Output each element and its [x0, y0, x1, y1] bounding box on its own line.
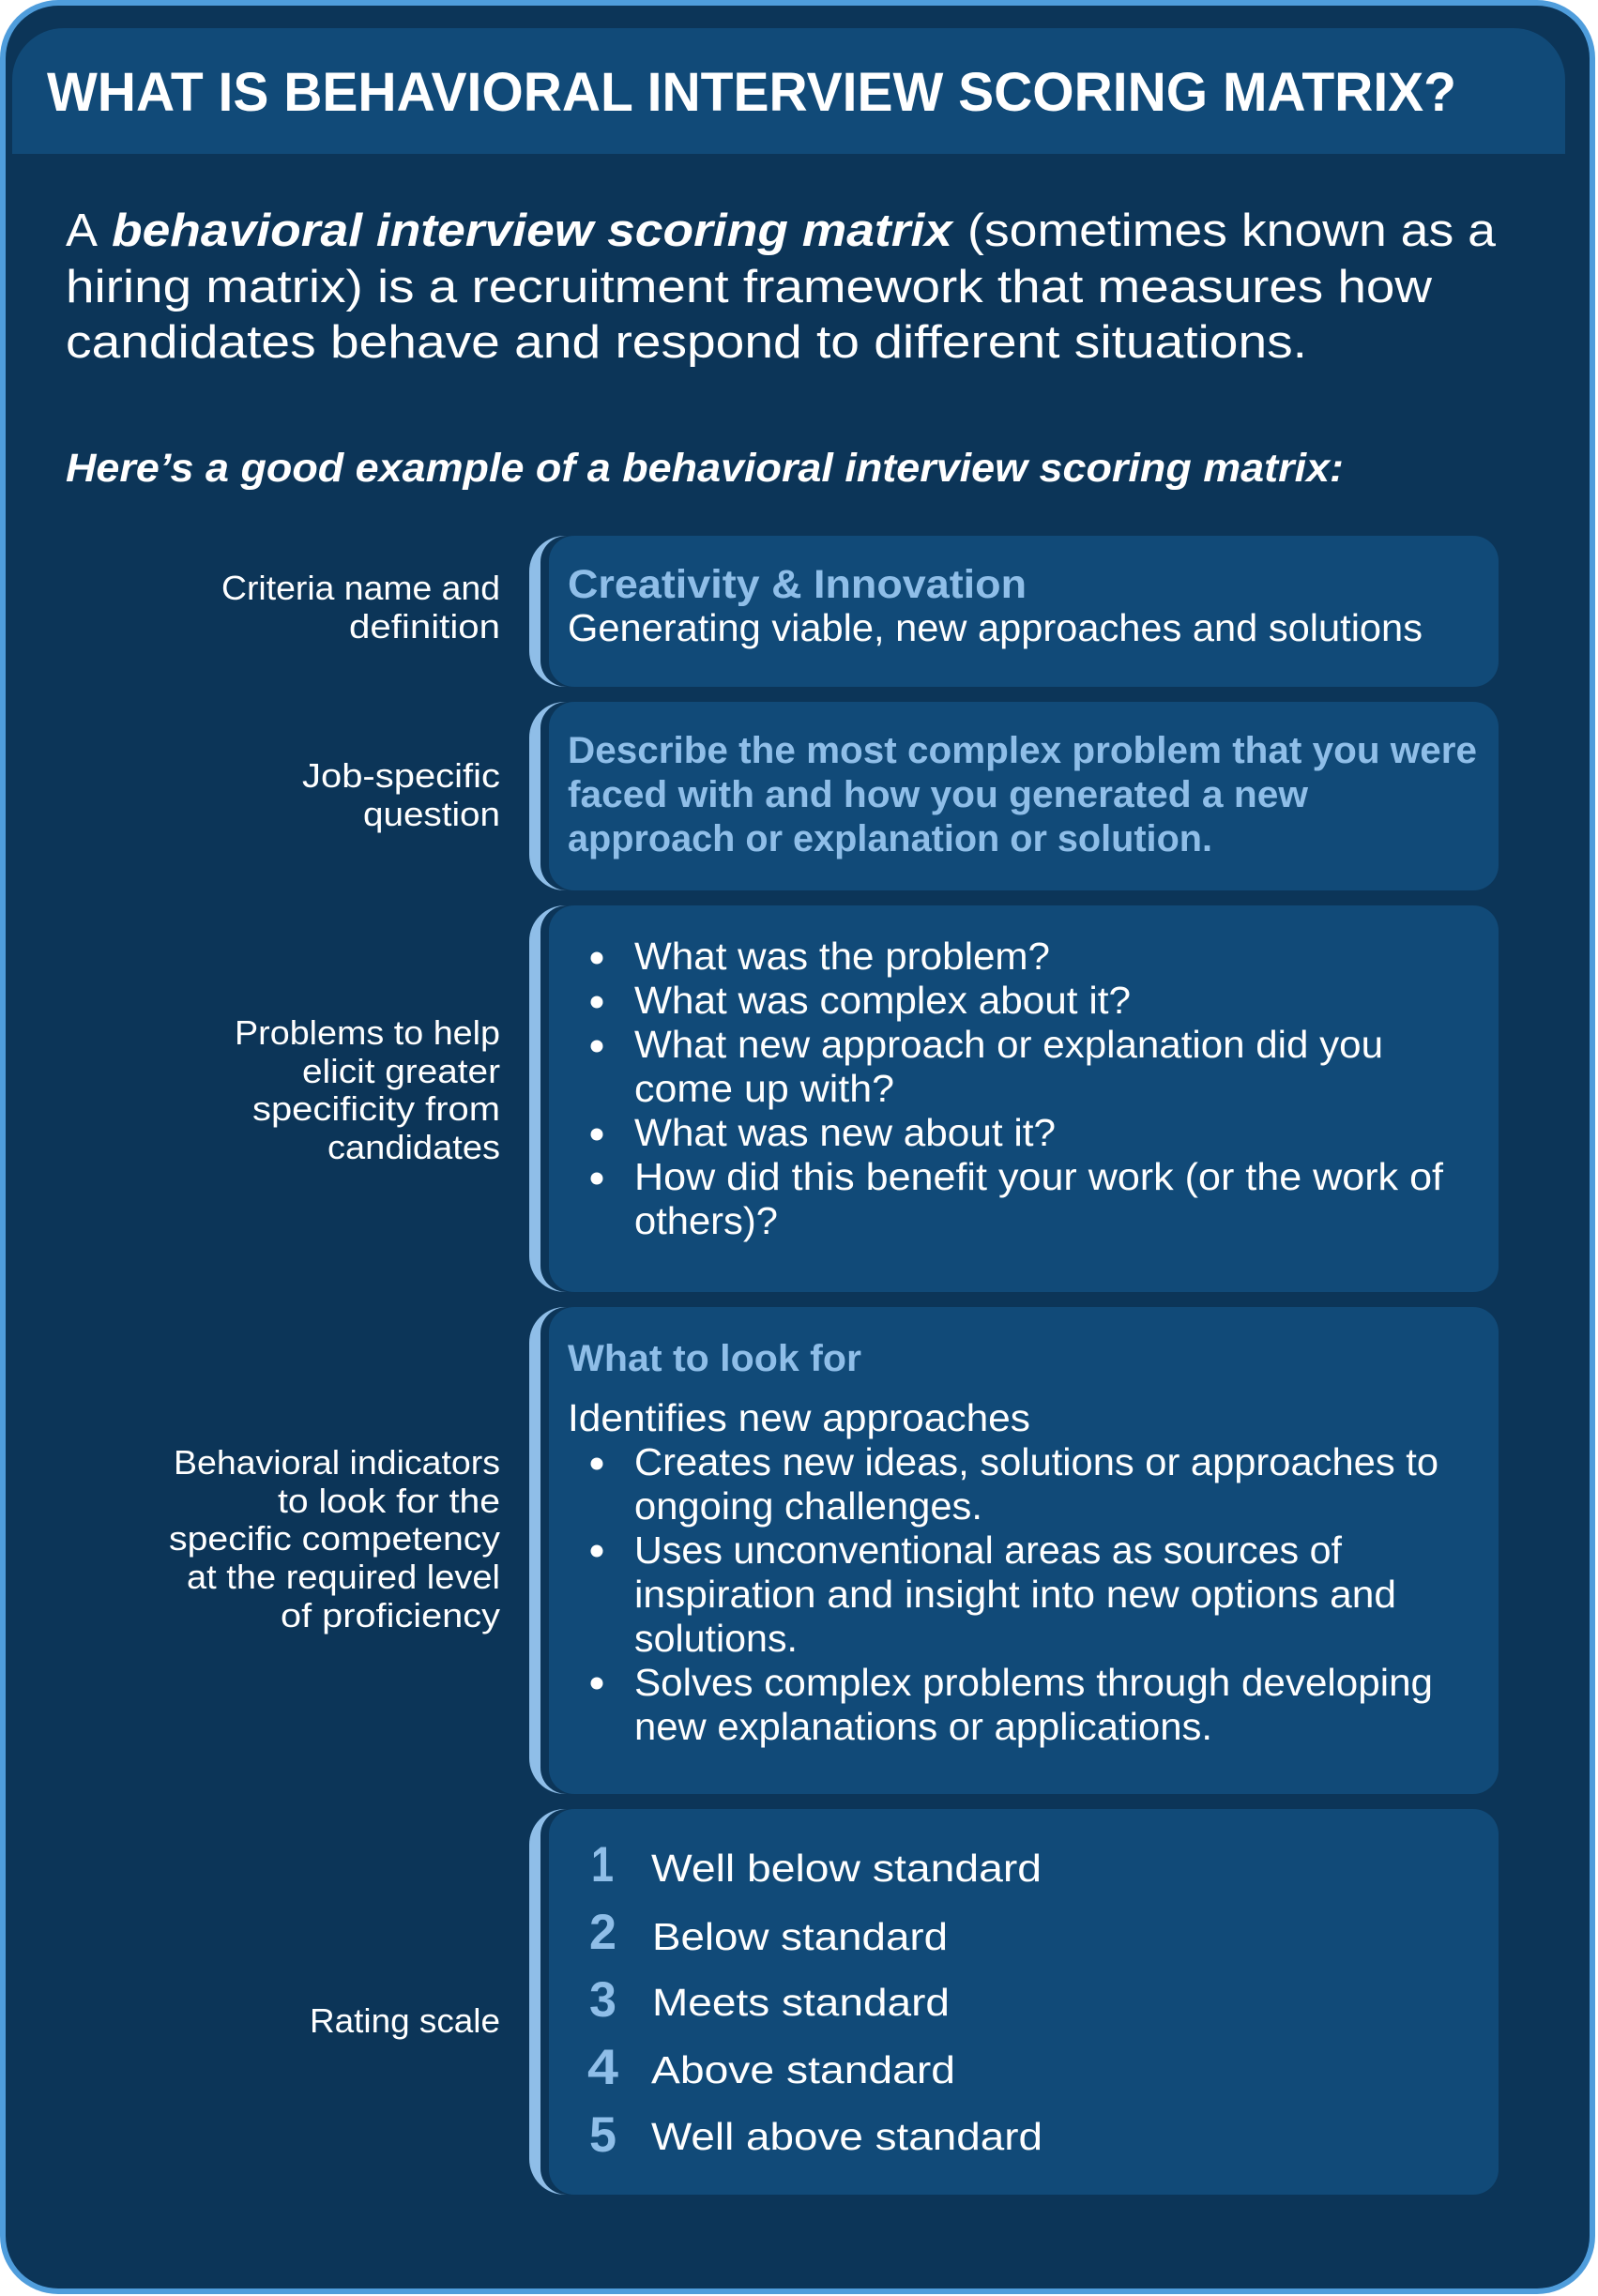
- bullet list: others)?: [634, 1199, 778, 1242]
- rating 1: 1: [591, 1837, 614, 1893]
- label: behavioral indicators: at the required level: [187, 1558, 500, 1596]
- title banner: WHAT IS BEHAVIORAL INTERVIEW SCORING MATRIX?: [47, 62, 1456, 123]
- panel: criteria: [529, 536, 1499, 687]
- indicator list: Creates new ideas, solutions or approaches to: [634, 1440, 1438, 1483]
- label: criteria name and definition: definition: [349, 607, 500, 646]
- panel heading: What to look for: [568, 1338, 861, 1379]
- label: job-specific question: [302, 756, 500, 833]
- label: behavioral indicators: Behavioral indicators: [174, 1443, 500, 1482]
- rating 4: [587, 2040, 955, 2095]
- rating 5: 5: [589, 2107, 616, 2163]
- label: probes: candidates: [327, 1128, 500, 1166]
- rating 2: 2: [589, 1905, 616, 1960]
- intro paragraph: candidates behave and respond to different situations.: [66, 317, 1307, 368]
- rating 3: 3: [589, 1972, 616, 2028]
- criteria definition: Generating viable, new approaches and solutions: [568, 606, 1423, 649]
- panel: job-specific question: [529, 702, 1499, 890]
- rating 2: Below standard: [652, 1915, 948, 1958]
- rating 1: [591, 1837, 1042, 1893]
- label: probes: Problems to help: [235, 1013, 500, 1052]
- label: job-specific question: question: [363, 795, 500, 833]
- label: behavioral indicators: [169, 1443, 500, 1635]
- label: criteria name and definition: [221, 569, 500, 646]
- question text: [568, 730, 1477, 859]
- indicator list: inspiration and insight into new options and: [634, 1573, 1396, 1616]
- indicator list: ongoing challenges.: [634, 1484, 982, 1528]
- bullet list: What was new about it?: [634, 1111, 1056, 1154]
- label: probes: elicit greater: [302, 1052, 500, 1090]
- question text: approach or explanation or solution.: [568, 818, 1212, 859]
- question text: Describe the most complex problem that you were: [568, 730, 1477, 771]
- intro paragraph: hiring matrix) is a recruitment framework that measures how: [66, 262, 1433, 312]
- intro paragraph: [66, 205, 1497, 368]
- bullet list: What new approach or explanation did you: [634, 1023, 1383, 1066]
- intro paragraph: behavioral interview scoring matrix: [112, 205, 954, 256]
- indicator list: new explanations or applications.: [634, 1705, 1212, 1748]
- indicator list: Identifies new approaches: [568, 1396, 1030, 1439]
- label: criteria name and definition: Criteria name and: [221, 569, 500, 607]
- label: rating scale: Rating scale: [310, 2001, 500, 2040]
- panel: probing questions: [529, 905, 1499, 1292]
- bullet list: What was the problem?: [634, 935, 1050, 978]
- bullet list: How did this benefit your work (or the work of: [634, 1155, 1444, 1198]
- bullet list: [591, 935, 1444, 1242]
- intro paragraph: (sometimes known as a: [967, 205, 1497, 256]
- title banner: [12, 28, 1565, 154]
- rating 4: 4: [587, 2040, 619, 2095]
- indicator list: solutions.: [634, 1617, 798, 1660]
- panel: what to look for: [529, 1307, 1499, 1794]
- label: behavioral indicators: to look for the: [278, 1482, 500, 1520]
- bullet list: come up with?: [634, 1067, 894, 1110]
- label: job-specific question: Job-specific: [302, 756, 500, 795]
- rating 5: [589, 2107, 1043, 2163]
- bullet list: What was complex about it?: [634, 979, 1131, 1022]
- indicator list: Uses unconventional areas as sources of: [634, 1528, 1343, 1572]
- label: probes: specificity from: [252, 1089, 500, 1128]
- label: behavioral indicators: of proficiency: [281, 1596, 500, 1635]
- rating 3: Meets standard: [652, 1981, 950, 2024]
- subheading: Here’s a good example of a behavioral interview scoring matrix:: [66, 446, 1344, 491]
- rating 3: [589, 1972, 950, 2028]
- intro paragraph: A: [66, 205, 98, 256]
- question text: faced with and how you generated a new: [568, 774, 1309, 815]
- criteria name: Creativity & Innovation: [568, 562, 1027, 607]
- rating 2: [589, 1905, 948, 1960]
- label: behavioral indicators: specific competency: [169, 1519, 500, 1558]
- rating 4: Above standard: [651, 2048, 955, 2091]
- panel: rating scale: [529, 1809, 1499, 2195]
- indicator list: [568, 1396, 1438, 1748]
- rating 5: Well above standard: [651, 2115, 1043, 2158]
- indicator list: Solves complex problems through developing: [634, 1661, 1433, 1704]
- label: probes: [235, 1013, 500, 1166]
- rating 1: Well below standard: [651, 1847, 1042, 1890]
